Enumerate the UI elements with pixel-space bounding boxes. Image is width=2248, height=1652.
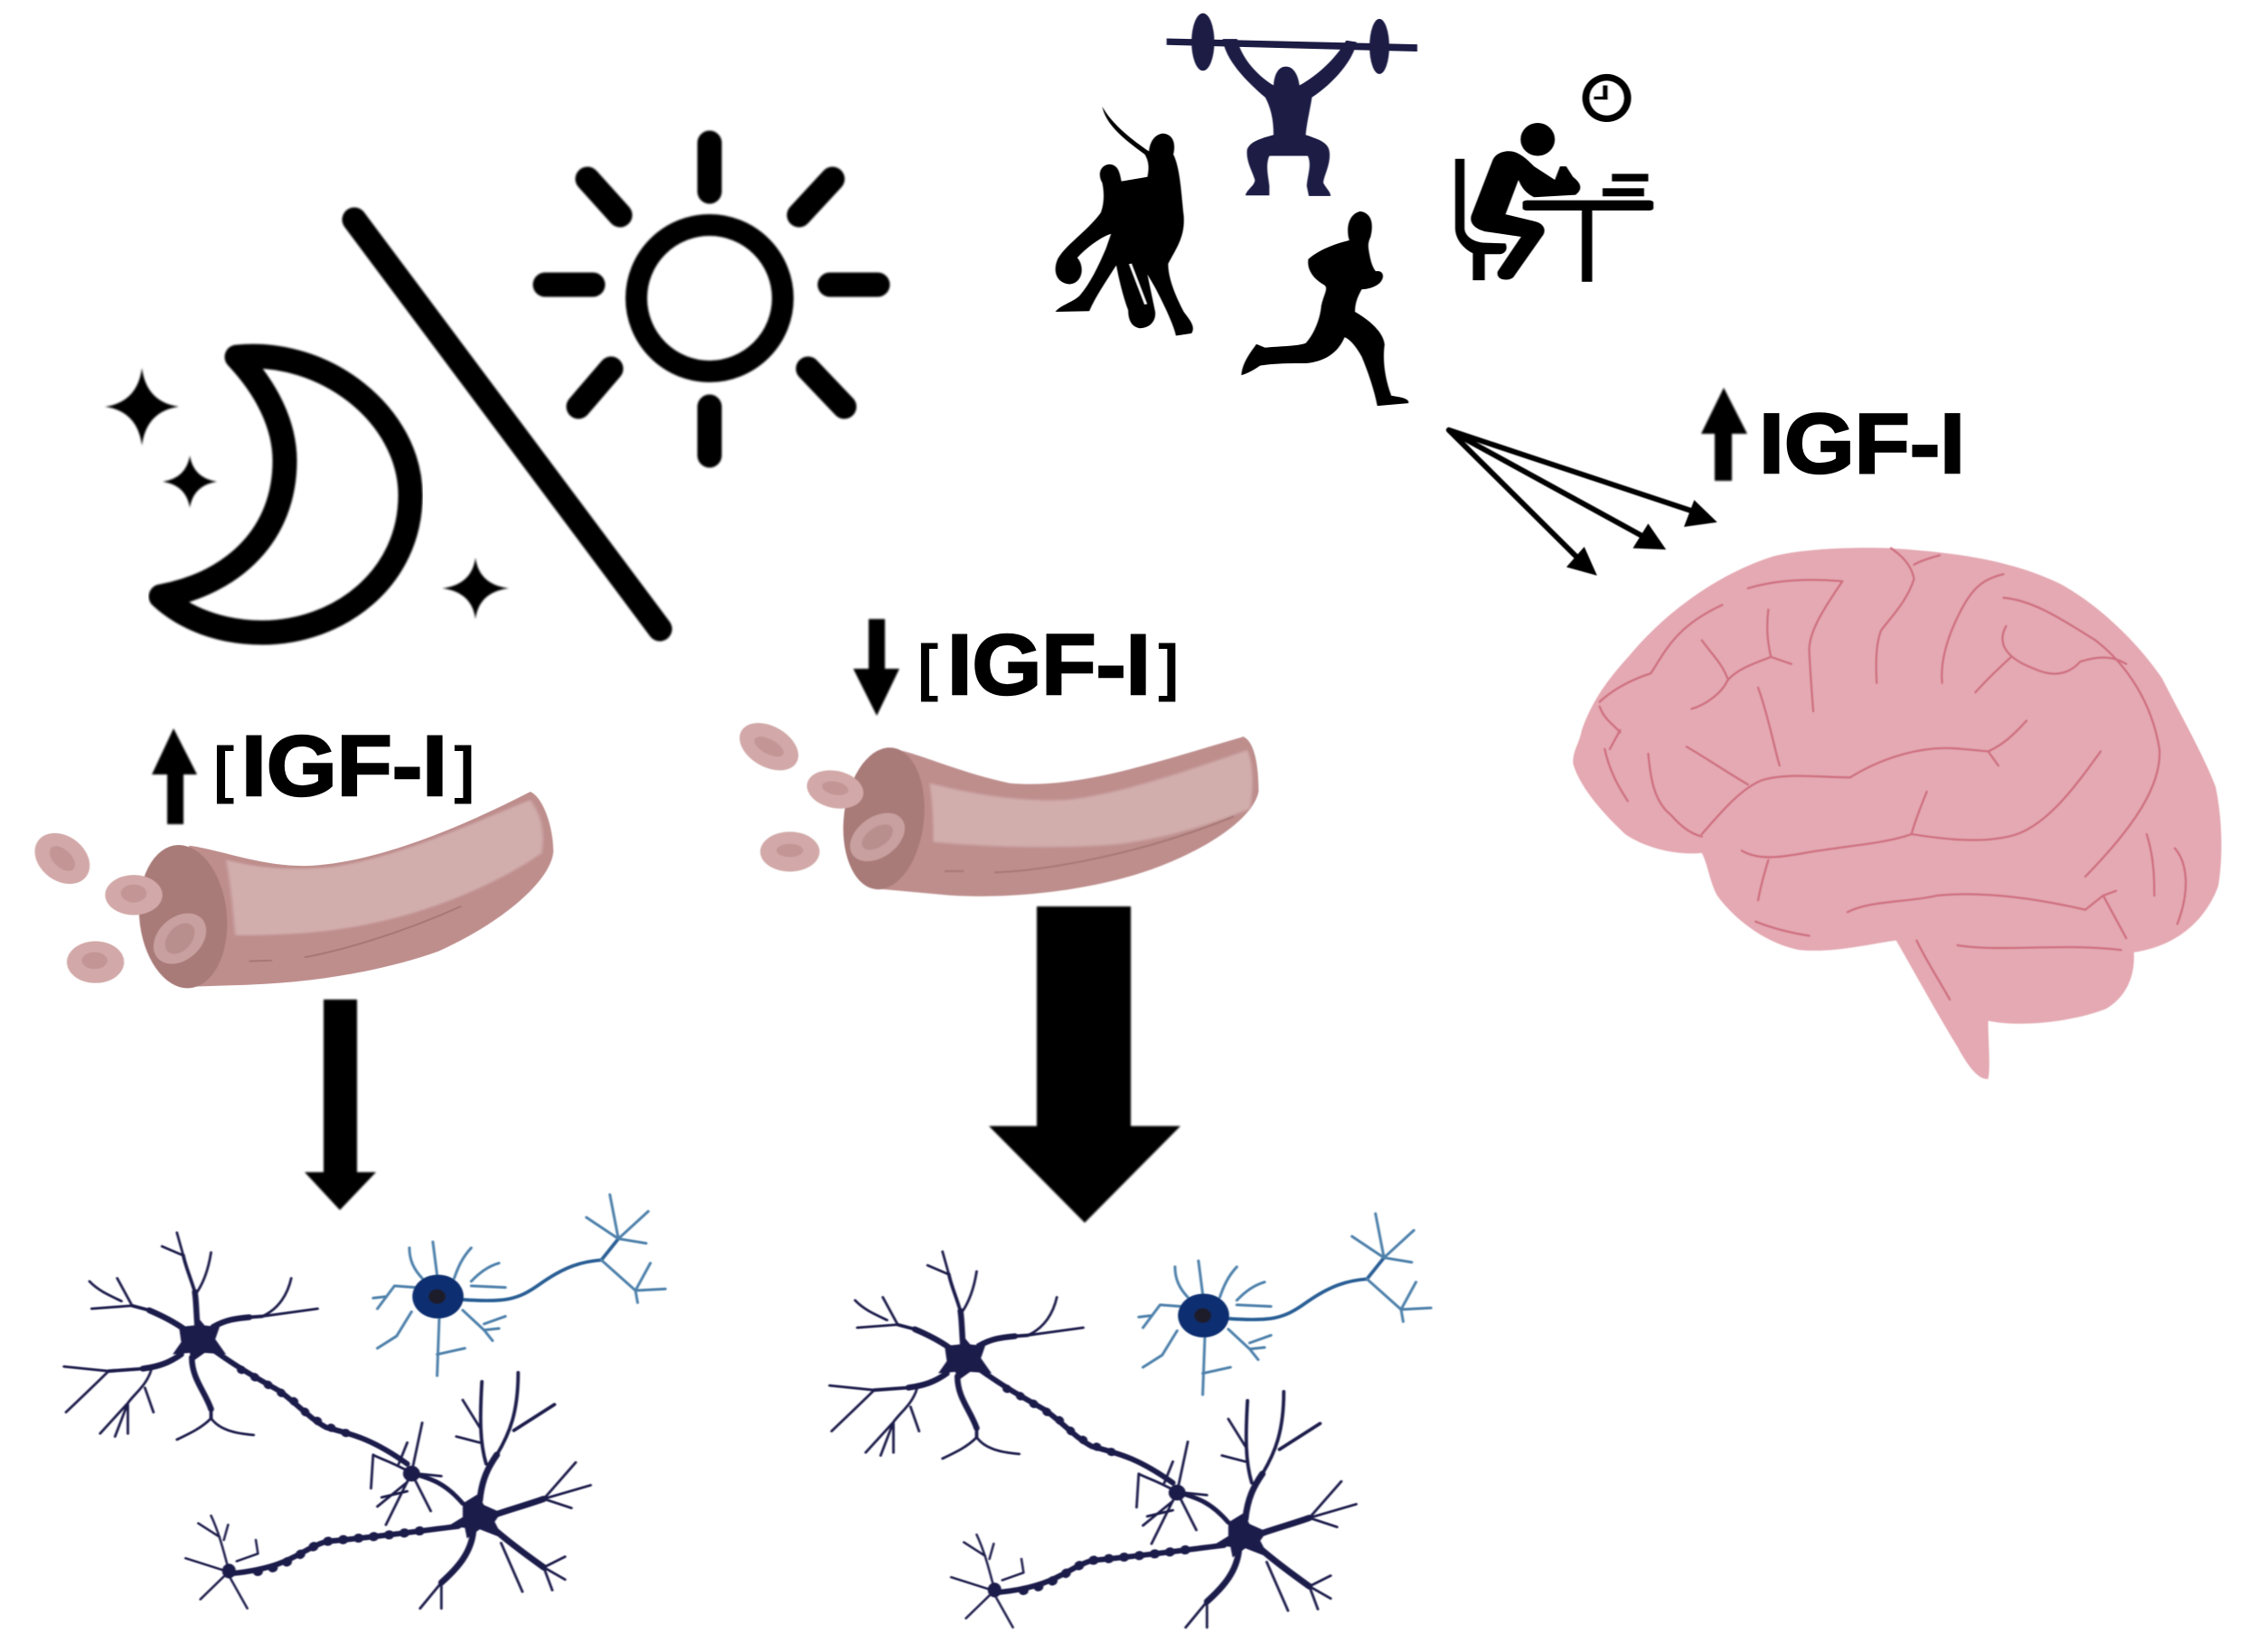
text: [IGF-I]: ]	[1158, 632, 1179, 702]
text: [IGF-I]: IGF-I	[241, 718, 447, 814]
label: increased IGF-I at the brain	[1701, 388, 1965, 491]
label: increased serum IGF-I (left)	[152, 718, 475, 824]
icon: runner	[1241, 211, 1408, 406]
icon: sun	[545, 143, 878, 455]
icon: up arrow	[1701, 388, 1747, 481]
icon: crescent moon	[161, 356, 410, 633]
icon: blood vessel (middle)	[733, 714, 1258, 896]
icon: down arrow	[853, 619, 899, 716]
icon: stars	[105, 368, 509, 619]
text: [IGF-I]: [	[213, 734, 234, 804]
divider slash between night and day	[354, 220, 660, 629]
icon: blood vessel (left)	[24, 792, 553, 990]
label: decreased serum IGF-I (middle)	[853, 617, 1179, 716]
icon: neuron network (left)	[64, 1195, 665, 1609]
arrows: activities acting on the brain	[1449, 430, 1717, 576]
icon: person studying at a desk with clock	[1455, 74, 1653, 282]
icon: basketball players	[1056, 107, 1193, 336]
text: [IGF-I]: ]	[454, 734, 475, 804]
icon: neuron network (middle)	[830, 1214, 1431, 1628]
icon: weightlifter	[1167, 14, 1417, 196]
icon: up arrow	[152, 728, 197, 824]
arrow: thick down arrow to neurons (middle)	[989, 906, 1180, 1223]
text: IGF-I: IGF-I	[1759, 396, 1965, 491]
arrow: thin down arrow to neurons (left)	[305, 1000, 376, 1210]
icon: brain	[1573, 548, 2222, 1079]
text: [IGF-I]: [	[917, 632, 938, 702]
text: [IGF-I]: IGF-I	[947, 617, 1151, 713]
